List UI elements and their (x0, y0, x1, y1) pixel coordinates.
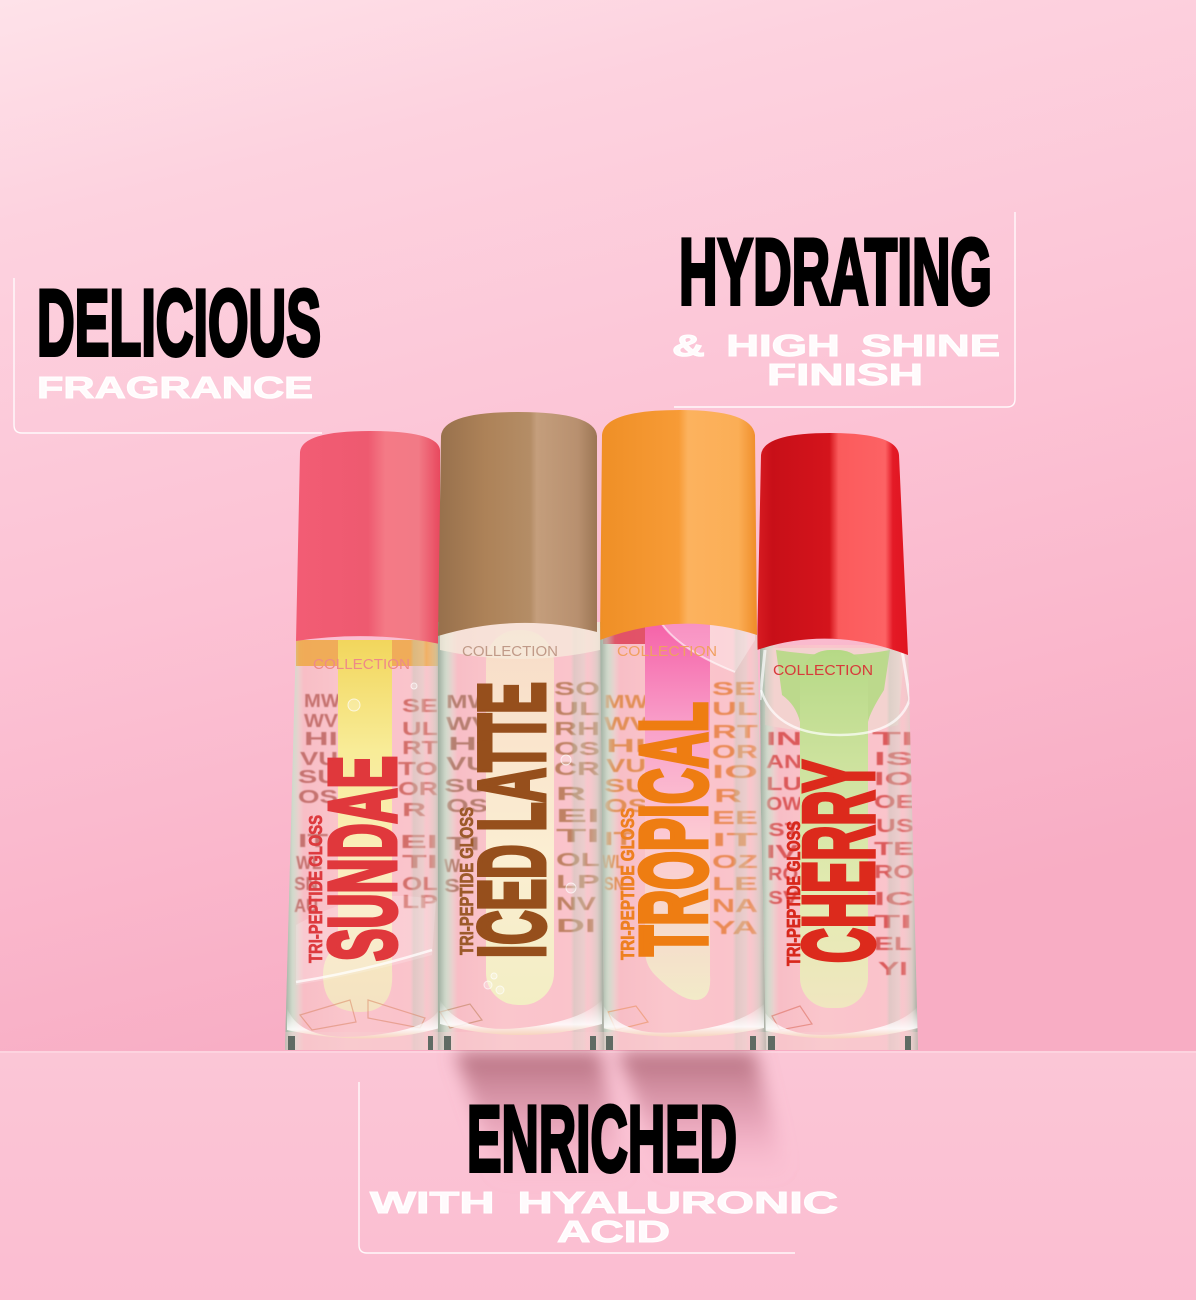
cap: Sundae (296, 431, 440, 644)
tube body: Sundae: IT (298, 831, 328, 851)
tube body: Iced Latte: RH (554, 719, 600, 739)
tube body: Cherry: OW (766, 794, 802, 814)
tube body: Iced Latte: OL (556, 850, 600, 870)
tube body: Cherry: AN (766, 752, 802, 772)
cap: Iced Latte (438, 412, 597, 636)
tube body: Iced Latte: HI (448, 734, 488, 754)
heading: enriched: ENRICHED (467, 1086, 737, 1191)
tube body: Tropical: IT (604, 829, 634, 849)
tube body: Tropical: SN (604, 874, 624, 894)
tube body: Tropical: OS (604, 796, 648, 816)
tube body: Cherry: ST (768, 820, 800, 840)
product: Iced Latte gloss (438, 412, 604, 1050)
heading: delicious: DELICIOUS (37, 270, 321, 375)
tube body: Cherry: SV (768, 888, 798, 908)
tube body: Iced Latte (438, 622, 604, 1050)
tube body: Cherry: EL (874, 934, 912, 954)
label: Sundae name: SUNDAE (310, 756, 416, 961)
label: Iced Latte name: ICED LATTE (459, 682, 564, 958)
tube body: Tropical: SU (604, 776, 648, 796)
callout frame (14, 278, 322, 433)
tube body: Cherry: LU (766, 774, 802, 794)
tube body: Sundae: WL (296, 853, 322, 873)
tube body: Sundae: TO (398, 759, 438, 779)
tube body: Iced Latte: UL (554, 699, 600, 719)
tube body: Cherry: IV (766, 842, 798, 862)
tube body: Sundae: OL (402, 874, 438, 894)
tube body: Tropical: YA (712, 918, 758, 938)
tube body: Tropical: OR (712, 742, 758, 762)
floor shelf (0, 1051, 1196, 1300)
brand: Tropical: COLLECTION (617, 643, 717, 660)
tube body: Sundae: SU (298, 767, 338, 787)
tube body: Tropical: HI (606, 736, 646, 756)
label: Sundae gloss line: TRI-PEPTIDE GLOSS (306, 815, 326, 963)
tube body: Sundae: OR (398, 779, 438, 799)
tube body: Tropical: SE (712, 679, 756, 699)
tube body: Tropical: UL (712, 699, 758, 719)
tube body: Iced Latte: TI (446, 834, 480, 854)
tube body: Tropical: MW (604, 692, 648, 712)
tube body: Sundae: LP (402, 892, 438, 912)
tube body: Tropical: NA (712, 896, 758, 916)
tube body: Cherry: RO (768, 864, 798, 884)
tube body: Sundae: TI (402, 852, 438, 872)
tube body: Cherry: IO (874, 769, 914, 789)
tube body: Cherry: US (876, 816, 914, 836)
tube body: Tropical: IT (712, 830, 758, 850)
tube body: Tropical: WV (604, 714, 648, 734)
tube body: Iced Latte: CR (554, 759, 600, 779)
tube body: Iced Latte: S (444, 876, 460, 896)
tube body: Sundae: VU (300, 749, 338, 769)
label: Iced Latte gloss line: TRI-PEPTIDE GLOSS (457, 807, 477, 955)
tube body: Sundae: AU (294, 896, 318, 916)
label: Tropical name: TROPICAL (621, 702, 727, 956)
product: Tropical gloss (600, 410, 766, 1050)
tube body: Iced Latte: VU (446, 754, 488, 774)
callout: hydrating high shine finish (672, 212, 1015, 407)
tube body: Sundae: OS (298, 787, 338, 807)
callout frame (359, 1082, 795, 1253)
subheading: with hyaluronic acid: WITH HYALURONIC (370, 1185, 838, 1220)
tube body: Cherry: TE (874, 839, 914, 859)
tube body: Sundae: UL (402, 719, 438, 739)
callout frame (674, 212, 1015, 407)
tube body: Sundae: SE (402, 696, 438, 716)
tube cast shadows (455, 1052, 785, 1180)
brand: Cherry: COLLECTION (773, 662, 873, 679)
brand: Sundae: COLLECTION (313, 656, 410, 673)
tube body: Tropical: R (714, 786, 742, 806)
product: Sundae gloss (285, 431, 442, 1050)
tube body: Iced Latte: NV (556, 894, 596, 914)
label: Tropical gloss line: TRI-PEPTIDE GLOSS (618, 808, 638, 960)
tube body: Iced Latte: W (444, 856, 460, 876)
tube body: Sundae: MW (304, 691, 340, 711)
tube body: Sundae: SN (294, 874, 318, 894)
tube body: Iced Latte: R (556, 784, 586, 804)
tube body: Cherry: TI (874, 912, 912, 932)
tube body: Sundae: WV (304, 711, 338, 731)
tube body: Sundae: R (402, 800, 426, 820)
tube body: Iced Latte: SU (444, 776, 488, 796)
tube body: Sundae: RT (402, 738, 438, 758)
callout: delicious fragrance (14, 270, 322, 433)
tube body: Iced Latte: EI (556, 806, 600, 826)
tube body: Sundae: EI (400, 832, 438, 852)
tube body: Iced Latte: TI (556, 826, 600, 846)
tube body: Tropical: LE (712, 874, 758, 894)
brand: Iced Latte: COLLECTION (462, 643, 558, 660)
tube body: Cherry: YI (878, 959, 908, 979)
subheading: with hyaluronic acid: ACID (557, 1214, 670, 1249)
tube body: Tropical: IO (712, 762, 758, 782)
tube body: Cherry: IN (766, 729, 802, 749)
tube body: Tropical: VU (606, 756, 646, 776)
tube body: Tropical: WL (602, 852, 624, 872)
tube body: Iced Latte: SO (554, 679, 600, 699)
tube body: Iced Latte: OS (554, 739, 600, 759)
product: Cherry gloss: CHERRY (783, 760, 895, 963)
tube body: Iced Latte: OS (446, 796, 488, 816)
cap: Cherry (757, 433, 908, 655)
subheading: high shine finish: FINISH (767, 357, 923, 392)
label: Cherry gloss line: TRI-PEPTIDE GLOSS (784, 821, 804, 966)
tube body: Cherry: OE (874, 792, 914, 812)
callout: enriched with hyaluronic acid (359, 1082, 838, 1253)
tube body: Cherry: IC (874, 889, 914, 909)
tube body: Tropical (600, 622, 766, 1050)
product: Cherry gloss (757, 433, 918, 1050)
tube body: Cherry: IS (874, 749, 914, 769)
tube body: Tropical: EE (712, 808, 758, 828)
tube body: Sundae (285, 640, 442, 1050)
tube body: Tropical: RT (712, 722, 758, 742)
tube body: Cherry: RO (874, 862, 914, 882)
tube body: Iced Latte: DI (556, 916, 596, 936)
tube body: Sundae: HI (304, 729, 338, 749)
tube body: Tropical: OZ (712, 852, 758, 872)
subheading: high shine finish: & HIGH SHINE (672, 328, 1000, 363)
tube body: Iced Latte: MW (446, 692, 492, 712)
subheading: fragrance: FRAGRANCE (37, 370, 313, 405)
tube body: Cherry: TI (872, 729, 914, 749)
tube body: Iced Latte: LP (556, 872, 600, 892)
tube body: Iced Latte: WV (446, 714, 490, 734)
tube body: Cherry (760, 645, 918, 1050)
cap: Tropical (600, 410, 757, 640)
